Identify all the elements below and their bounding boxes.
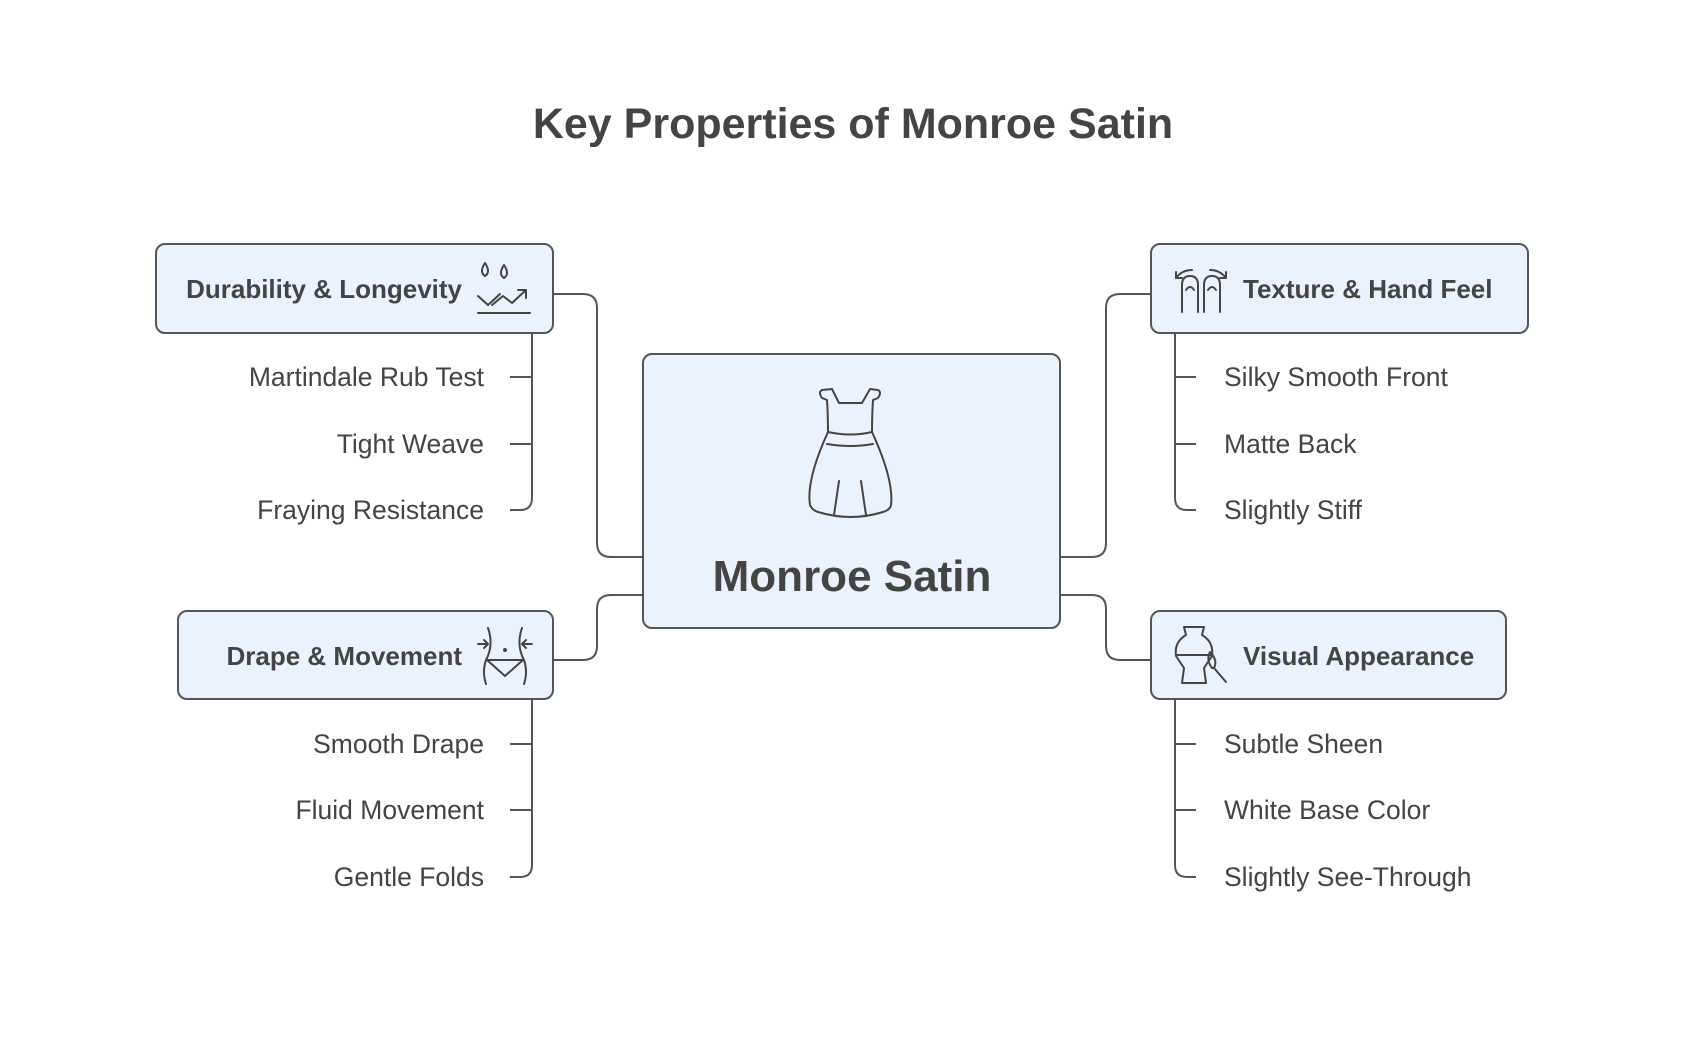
list: visual items: White Base Color	[1224, 795, 1430, 825]
list: drape items: Smooth Drape	[313, 729, 484, 759]
list: texture items: Matte Back	[1224, 429, 1357, 459]
panel: Texture & Hand Feel: Texture & Hand Feel	[1243, 274, 1492, 304]
list: drape items: Fluid Movement	[295, 795, 485, 825]
list: texture items	[1175, 333, 1448, 525]
panel: Durability & Longevity: Durability & Longevity	[186, 274, 463, 304]
center node: Monroe Satin	[643, 354, 1060, 628]
list: durability items: Tight Weave	[337, 429, 484, 459]
title: Key Properties of Monroe Satin	[533, 100, 1173, 148]
icon: vase and brush	[1176, 627, 1226, 683]
panel: Visual Appearance: Visual Appearance	[1243, 641, 1474, 671]
panel: Drape & Movement	[178, 611, 553, 892]
list: visual items: Subtle Sheen	[1224, 729, 1383, 759]
list: visual items: Slightly See-Through	[1224, 862, 1471, 892]
icon: body waist	[478, 628, 532, 684]
connectors	[553, 294, 1151, 660]
icon: fingers	[1176, 270, 1226, 312]
list: visual items	[1175, 699, 1471, 892]
list: texture items: Silky Smooth Front	[1224, 362, 1448, 392]
panel: Durability & Longevity	[156, 244, 553, 525]
icon: dress	[809, 389, 891, 517]
center node: Monroe Satin: Monroe Satin	[713, 552, 991, 601]
list: texture items: Slightly Stiff	[1224, 495, 1363, 525]
list: durability items	[249, 333, 532, 525]
panel: Drape & Movement: Drape & Movement	[226, 641, 462, 671]
list: drape items	[295, 699, 532, 892]
list: drape items: Gentle Folds	[334, 862, 484, 892]
panel: Texture & Hand Feel	[1151, 244, 1528, 525]
icon: drops and arrows	[478, 263, 530, 313]
list: durability items: Fraying Resistance	[257, 495, 484, 525]
panel: Visual Appearance	[1151, 611, 1506, 892]
list: durability items: Martindale Rub Test	[249, 362, 485, 392]
